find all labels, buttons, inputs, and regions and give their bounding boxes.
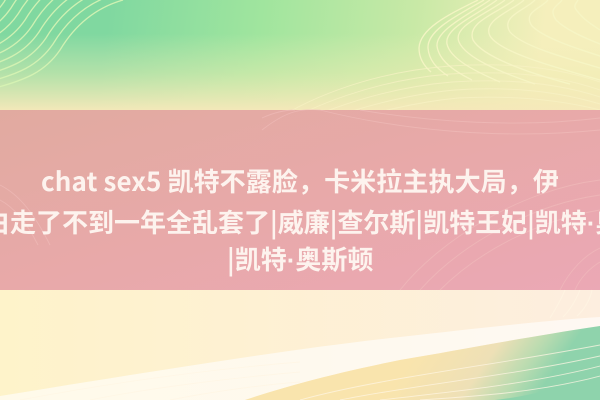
bottom white swoosh xyxy=(0,317,600,400)
pink band xyxy=(0,110,600,290)
bottom sand wave xyxy=(245,326,600,400)
middle-right wave lines xyxy=(262,65,600,130)
bottom green corner xyxy=(495,372,600,400)
title line 3: |凯特·奥斯顿 xyxy=(227,240,373,277)
bottom wave lines xyxy=(20,290,600,400)
title line 1: chat sex5 凯特不露脸，卡米拉主执大局，伊 xyxy=(41,162,559,199)
top-right wave lines xyxy=(419,0,600,84)
band wave lines xyxy=(0,110,600,290)
top-left wave lines xyxy=(0,0,123,88)
